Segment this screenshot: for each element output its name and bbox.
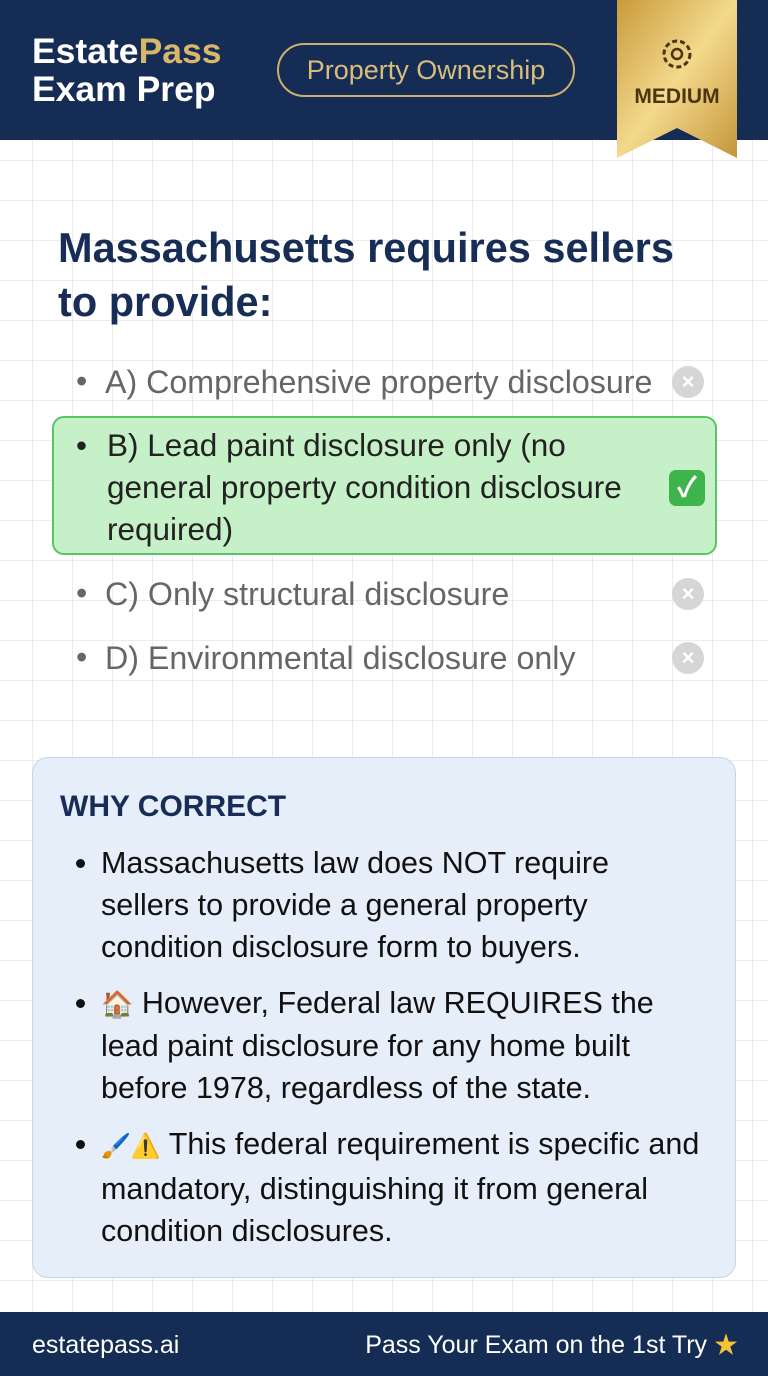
text: × — [682, 581, 694, 606]
footer: estatepass.ai — [32, 1331, 179, 1359]
option C: • — [76, 575, 87, 611]
difficulty ribbon: MEDIUM — [634, 85, 720, 108]
option A: A) Comprehensive property disclosure — [105, 364, 652, 400]
category pill: Property Ownership — [307, 55, 545, 85]
option B correct: B) Lead paint disclosure only (no — [107, 427, 566, 463]
option B correct: required) — [107, 511, 233, 547]
panel heading: WHY CORRECT — [60, 790, 286, 823]
question heading: Massachusetts requires sellers — [58, 224, 674, 271]
explanation panel — [32, 757, 736, 1278]
explanation bullets: Massachusetts law does NOT require — [101, 846, 609, 880]
logo text — [32, 31, 221, 109]
text: × — [682, 645, 694, 670]
option A: • — [76, 363, 87, 399]
explanation bullets — [76, 846, 699, 1248]
difficulty ribbon — [617, 0, 737, 158]
explanation bullets: mandatory, distinguishing it from general — [101, 1172, 648, 1206]
explanation bullets: condition disclosures. — [101, 1214, 393, 1248]
question heading — [58, 224, 674, 325]
explanation bullets: condition disclosure form to buyers. — [101, 930, 581, 964]
option D: • — [76, 639, 87, 675]
text: × — [682, 369, 694, 394]
logo text: EstatePass — [32, 31, 221, 71]
option D: D) Environmental disclosure only — [105, 640, 576, 676]
explanation bullets: before 1978, regardless of the state. — [101, 1071, 591, 1105]
header — [0, 0, 768, 140]
icon: check — [669, 470, 705, 506]
option B correct: • — [76, 427, 87, 463]
category pill — [277, 43, 575, 97]
logo text: Exam Prep — [32, 69, 216, 109]
question heading: to provide: — [58, 278, 272, 325]
icon: check: ✓ — [677, 472, 697, 503]
footer: Pass Your Exam on the 1st Try ★ — [365, 1331, 738, 1359]
option B correct: general property condition disclosure — [107, 469, 622, 505]
explanation bullets: lead paint disclosure for any home built — [101, 1029, 630, 1063]
footer — [0, 1312, 768, 1376]
option B correct — [52, 416, 717, 555]
explanation bullets: sellers to provide a general property — [101, 888, 588, 922]
explanation bullets: 🖌️⚠️ This federal requirement is specific and — [101, 1127, 699, 1161]
option C: C) Only structural disclosure — [105, 576, 509, 612]
explanation bullets: 🏠 However, Federal law REQUIRES the — [101, 986, 654, 1020]
